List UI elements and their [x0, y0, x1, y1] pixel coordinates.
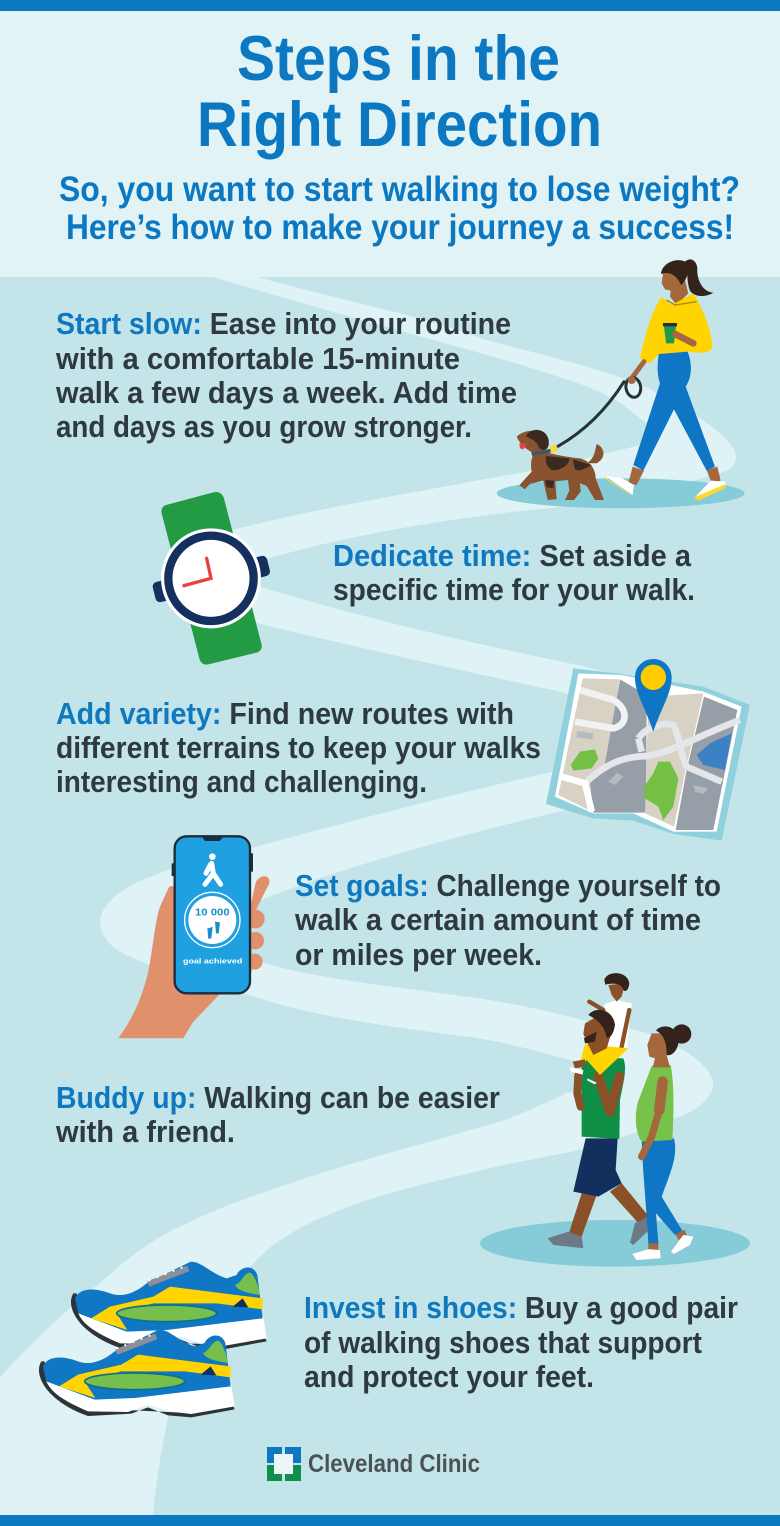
- illustration: shoe back: [71, 1262, 267, 1349]
- subtitle: [59, 170, 740, 247]
- illustration: hand holding phone: [118, 836, 269, 1038]
- logo: Cleveland Clinic: [267, 1447, 480, 1481]
- title: [197, 24, 602, 160]
- text: start slow: Start slow: Ease into your routine: [56, 307, 511, 341]
- walker icon: [205, 853, 221, 884]
- header panel: [0, 11, 780, 277]
- clock hands: [184, 558, 211, 586]
- title: Right Direction: [197, 90, 602, 160]
- text: set goals: Set goals: Challenge yourself to: [295, 869, 721, 903]
- child's foot: [573, 1059, 585, 1068]
- top bar: [0, 0, 780, 11]
- text: add variety: different terrains to keep your walks: [56, 731, 541, 765]
- illustration: shoe front: [39, 1330, 235, 1417]
- illustration: family walking: [480, 973, 750, 1267]
- title: Steps in the: [237, 24, 560, 94]
- text: start slow: with a comfortable 15-minute: [55, 342, 460, 376]
- man's shirt: [582, 1057, 625, 1139]
- pants: [633, 351, 715, 471]
- dog: [517, 430, 604, 500]
- arm holding leash: [632, 362, 644, 378]
- forearm with cup: [675, 334, 693, 343]
- text: set goals: walk a certain amount of time: [294, 903, 701, 937]
- hand: [118, 876, 269, 1038]
- text: buddy up: with a friend.: [55, 1115, 235, 1149]
- woman's neck and face: [662, 270, 688, 305]
- logo mark: [267, 1447, 301, 1481]
- text: invest in shoes: and protect your feet.: [304, 1360, 594, 1394]
- illustration: hand holding phone: 10 000: [195, 907, 230, 918]
- fingers: [246, 910, 265, 928]
- cup: [664, 326, 676, 343]
- text: start slow: and days as you grow stronger.: [56, 410, 472, 444]
- man's arms: [577, 1075, 581, 1107]
- woman's pants: [642, 1138, 682, 1243]
- text: add variety: Add variety: Find new routes with: [56, 697, 514, 731]
- text: start slow: walk a few days a week. Add time: [55, 376, 517, 410]
- illustration: map with pin: [546, 659, 750, 841]
- parks and lake: [571, 749, 678, 820]
- collar: [667, 300, 697, 305]
- text: invest in shoes: [304, 1291, 738, 1394]
- woman's shoes: [632, 1235, 693, 1260]
- illustration: watch: [152, 492, 271, 665]
- text: set goals: [294, 869, 721, 972]
- shoes: [605, 476, 634, 495]
- woman's hair: [661, 260, 688, 285]
- phone: [175, 836, 250, 993]
- illustration: hand holding phone: goal achieved: [183, 956, 242, 965]
- child's arm: [589, 1002, 629, 1047]
- man's head: [583, 1017, 613, 1055]
- text: add variety: interesting and challenging.: [56, 765, 427, 799]
- step counter badge: [185, 892, 240, 948]
- man's legs: [568, 1183, 649, 1237]
- map roads: [562, 690, 740, 812]
- woman's hair: [656, 1026, 679, 1055]
- woman's feet: [648, 1230, 687, 1250]
- map panels: [558, 678, 619, 812]
- man's shoes: [548, 1216, 649, 1248]
- shorts: [573, 1138, 622, 1197]
- text: set goals: or miles per week.: [295, 938, 542, 972]
- text: dedicate time: [333, 539, 695, 607]
- hoodie: [640, 293, 713, 363]
- woman's neck and face: [647, 1033, 670, 1067]
- woman's top: [636, 1065, 673, 1142]
- footprints: [207, 922, 220, 939]
- text: add variety: [56, 697, 541, 799]
- logo wordmark: Cleveland Clinic: [308, 1450, 480, 1478]
- location pin: [635, 659, 672, 732]
- crowns: [252, 555, 271, 578]
- illustration: woman walking dog: [497, 259, 745, 508]
- text: dedicate time: Dedicate time: Set aside a: [333, 539, 692, 573]
- text: buddy up: Buddy up: Walking can be easier: [56, 1081, 500, 1115]
- text: buddy up: [55, 1081, 500, 1149]
- text: start slow: [55, 307, 517, 444]
- bottom bar: [0, 1515, 780, 1526]
- ankles: [628, 467, 721, 485]
- leash: [557, 376, 642, 447]
- text: dedicate time: specific time for your walk.: [333, 573, 695, 607]
- winding path: [0, 277, 736, 1526]
- text: invest in shoes: Invest in shoes: Buy a good pair: [304, 1291, 738, 1325]
- child's shirt: [604, 1000, 632, 1050]
- child's head: [608, 983, 625, 1002]
- text: invest in shoes: of walking shoes that support: [304, 1326, 702, 1360]
- woman's arm: [659, 1082, 663, 1110]
- child's shorts: [578, 1044, 628, 1075]
- ponytail: [685, 259, 713, 296]
